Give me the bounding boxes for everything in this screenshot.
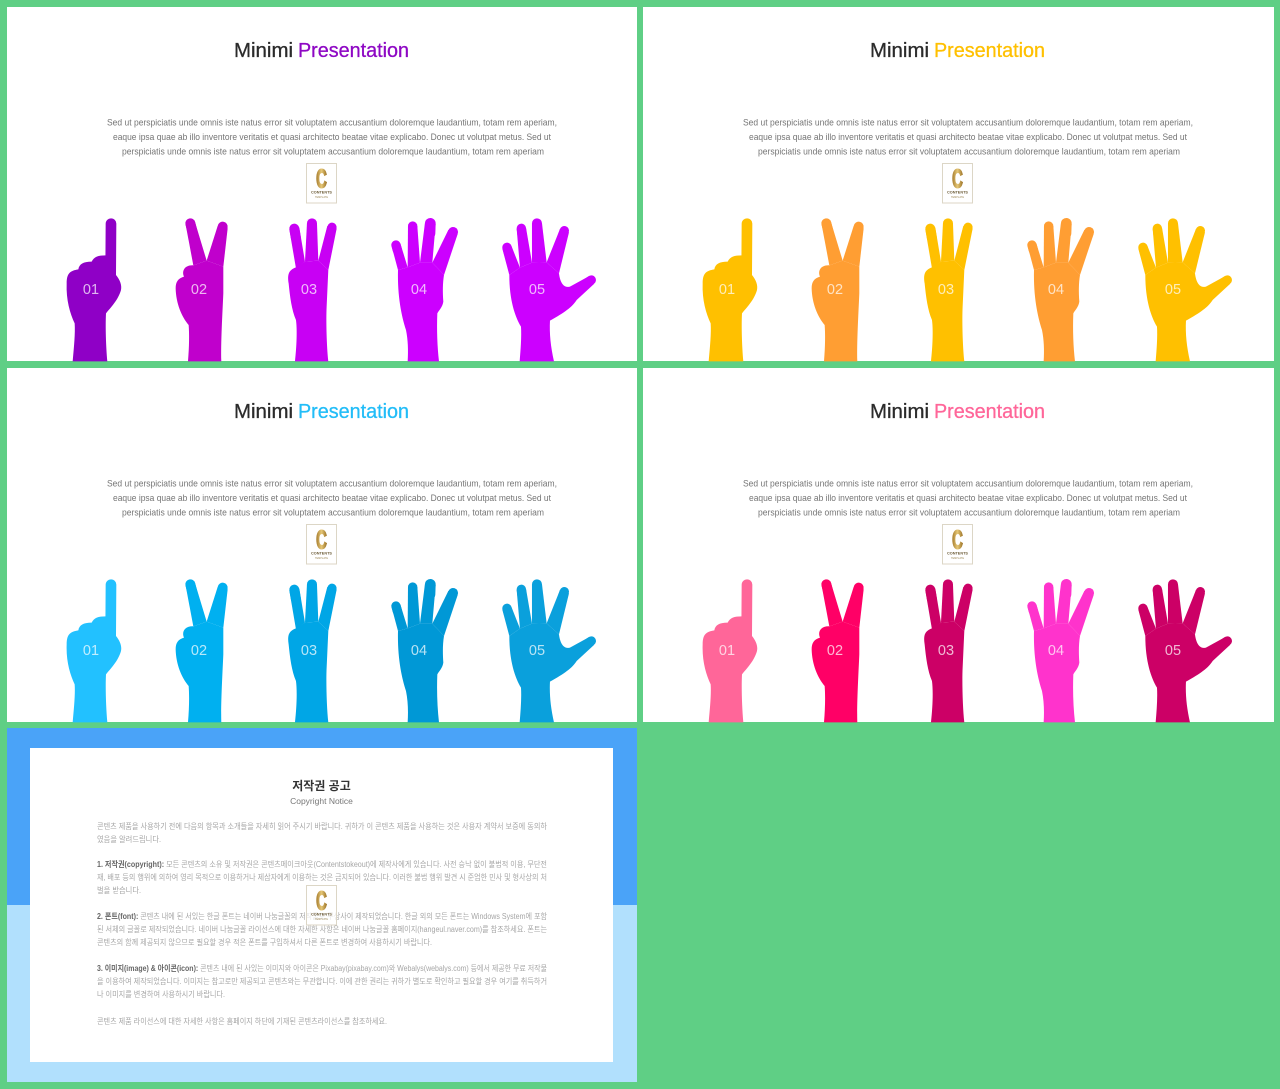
hand 03: 03 — [301, 282, 317, 298]
title: Presentation — [298, 40, 409, 62]
section 2: font — [97, 911, 548, 947]
hand 03 — [288, 584, 337, 722]
title: Presentation — [298, 401, 409, 423]
panel: copyright notice — [7, 728, 637, 1082]
body text: perspiciatis unde omnis iste natus error sit voluptatem accusantium doloremque laudantium, totam rem aperiam — [122, 508, 544, 518]
hand 04 — [392, 223, 458, 361]
section 3: images and icons: 3. 이미지(image) & 아이콘(icon): 콘텐츠 내에 된 사있는 이미지와 아이콘은 Pixabay(pixabay.com)와 Webalys(webalys.com) 등에서 제공한 무료 저작물 — [97, 963, 547, 973]
logo — [942, 164, 972, 203]
hand 04: 04 — [411, 282, 427, 298]
title: Presentation — [934, 40, 1045, 62]
hand 01 — [703, 224, 757, 361]
body text: eaque ipsa quae ab illo inventore veritatis et quasi architecto beatae vitae explicabo. Donec ut volutpat metus. Sed ut — [749, 493, 1187, 503]
hand 04 — [1028, 584, 1094, 722]
intro paragraph — [97, 821, 548, 844]
hand 03: 03 — [938, 282, 954, 298]
logo: C — [952, 526, 963, 555]
panel: purple hands — [7, 7, 637, 361]
title: Minimi — [234, 40, 293, 62]
hand 01 — [67, 585, 121, 722]
logo: C — [316, 165, 327, 194]
section 3: images and icons: 을 이용하여 제작되었습니다. 이미지는 참고로만 제공되고 콘텐츠와는 무관합니다. 이에 관한 권리는 귀하가 별도로 확인하고 필요할 경우 여기를 취득하거 — [97, 976, 547, 986]
copyright heading: 저작권 공고 — [292, 778, 351, 793]
hand 05 — [502, 584, 594, 722]
logo: TEMPLATE — [951, 196, 964, 199]
hand 05: 05 — [1165, 643, 1181, 659]
hand 04 — [392, 584, 458, 722]
title — [870, 40, 1045, 62]
body text — [107, 478, 557, 518]
hand 05 — [1138, 223, 1230, 361]
panel: yellow hands — [643, 7, 1274, 361]
section 1: copyright: 벌을 받습니다. — [97, 885, 141, 895]
hand 03: 03 — [938, 643, 954, 659]
hand 04: 04 — [411, 643, 427, 659]
hand 05 — [1138, 584, 1230, 722]
hand 01 — [67, 224, 121, 361]
hand 01: 01 — [83, 282, 99, 298]
title — [870, 401, 1045, 423]
section 2: font: 콘텐츠의 함께 제공되지 않으므로 필요할 경우 적은 폰트를 구입하셔서 다른 폰트로 변경하여 사용하시기 바랍니다. — [97, 937, 432, 947]
hand 01: 01 — [719, 282, 735, 298]
hand 01: 01 — [719, 643, 735, 659]
section 1: copyright: 1. 저작권(copyright): 모든 콘텐츠의 소유 및 저작권은 콘텐츠메이크아웃(Contentstokeout)에 제작사에게 있습니다. 사전 승낙 없이 불법적 이용, 무단전 — [97, 859, 547, 869]
logo: TEMPLATE — [951, 557, 964, 560]
logo: C — [952, 165, 963, 194]
closing line: 콘텐츠 제품 라이선스에 대한 자세한 사항은 홈페이지 하단에 기재된 콘텐츠라이선스를 참조하세요. — [97, 1016, 387, 1026]
hand 04: 04 — [1048, 643, 1064, 659]
body text: eaque ipsa quae ab illo inventore veritatis et quasi architecto beatae vitae explicabo. Donec ut volutpat metus. Sed ut — [749, 132, 1187, 142]
logo: CONTENTS — [311, 190, 332, 194]
section 2: font: 된 서체의 글꼴로 제작되었습니다. 네이버 나눔글꼴 라이선스에 대한 자세한 사항은 네이버 나눔글꼴 홈페이지(hangeul.naver.com)를 참조하세요. 폰트는 — [97, 924, 547, 934]
section 2: font: 2. 폰트(font): 콘텐츠 내에 된 서있는 한글 폰트는 네이버 나눔글꼴의 저작물로 무상사이 제작되었습니다. 한글 외의 모든 폰트는 Windows System에 포함 — [97, 911, 548, 921]
hand 01: 01 — [83, 643, 99, 659]
title — [234, 40, 409, 62]
logo: C — [316, 526, 327, 555]
section 1: copyright — [97, 859, 547, 895]
hand 03: 03 — [301, 643, 317, 659]
title: Presentation — [934, 401, 1045, 423]
hand 02: 02 — [191, 643, 207, 659]
logo: CONTENTS — [947, 552, 968, 556]
logo: C — [316, 887, 327, 916]
body text: Sed ut perspiciatis unde omnis iste natus error sit voluptatem accusantium doloremque laudantium, totam rem aperiam, — [107, 478, 557, 488]
body text: Sed ut perspiciatis unde omnis iste natus error sit voluptatem accusantium doloremque laudantium, totam rem aperiam, — [743, 118, 1193, 128]
hand 02 — [812, 222, 864, 361]
hand 02: 02 — [191, 282, 207, 298]
section 3: images and icons: 나 이미지를 변경하여 사용하시기 바랍니다. — [97, 989, 225, 999]
hand 05: 05 — [529, 643, 545, 659]
hand 05 — [502, 223, 594, 361]
logo — [942, 524, 972, 564]
logo: CONTENTS — [311, 912, 332, 916]
logo: CONTENTS — [947, 190, 968, 194]
body text: perspiciatis unde omnis iste natus error sit voluptatem accusantium doloremque laudantium, totam rem aperiam — [122, 146, 544, 156]
hand 05: 05 — [529, 282, 545, 298]
body text: perspiciatis unde omnis iste natus error sit voluptatem accusantium doloremque laudantium, totam rem aperiam — [758, 146, 1180, 156]
body text — [743, 478, 1193, 518]
hand 03 — [924, 584, 973, 722]
body text: Sed ut perspiciatis unde omnis iste natus error sit voluptatem accusantium doloremque laudantium, totam rem aperiam, — [107, 118, 557, 128]
panel: blue hands — [7, 368, 637, 722]
logo — [306, 164, 336, 203]
body text — [743, 118, 1193, 156]
copyright subheading: Copyright Notice — [290, 796, 353, 806]
hand 04 — [1028, 223, 1094, 361]
title: Minimi — [870, 40, 929, 62]
section 1: copyright: 재, 배포 등의 행위에 의하여 영리 목적으로 이용하거나 제삼자에게 이용하는 것은 금지되어 있습니다. 이러한 불법 행위 발견 시 준엄한 민사 및 형사상의 처 — [97, 872, 547, 882]
panel: pink hands — [643, 368, 1274, 722]
intro paragraph: 콘텐츠 제품을 사용하기 전에 다음의 항목과 소개들을 자세히 읽어 주시기 바랍니다. 귀하가 이 콘텐츠 제품을 사용하는 것은 사용자 계약서 보증에 동의하 — [97, 821, 548, 831]
logo — [306, 524, 336, 564]
hand 02 — [176, 222, 228, 361]
hand 01 — [703, 585, 757, 722]
body text: eaque ipsa quae ab illo inventore veritatis et quasi architecto beatae vitae explicabo. Donec ut volutpat metus. Sed ut — [113, 493, 551, 503]
logo: TEMPLATE — [315, 557, 328, 560]
title: Minimi — [234, 401, 293, 423]
body text: eaque ipsa quae ab illo inventore veritatis et quasi architecto beatae vitae explicabo. Donec ut volutpat metus. Sed ut — [113, 132, 551, 142]
title: Minimi — [870, 401, 929, 423]
body text — [107, 118, 557, 156]
hand 02: 02 — [827, 643, 843, 659]
logo: TEMPLATE — [315, 918, 328, 921]
body text: perspiciatis unde omnis iste natus error sit voluptatem accusantium doloremque laudantium, totam rem aperiam — [758, 508, 1180, 518]
hand 04: 04 — [1048, 282, 1064, 298]
hand 02: 02 — [827, 282, 843, 298]
title — [234, 401, 409, 423]
hand 03 — [288, 223, 337, 361]
hand 02 — [176, 583, 228, 722]
hand 05: 05 — [1165, 282, 1181, 298]
hand 03 — [924, 223, 973, 361]
logo: CONTENTS — [311, 552, 332, 556]
logo: TEMPLATE — [315, 196, 328, 199]
body text: Sed ut perspiciatis unde omnis iste natus error sit voluptatem accusantium doloremque laudantium, totam rem aperiam, — [743, 478, 1193, 488]
section 3: images and icons — [97, 963, 547, 999]
intro paragraph: 였음을 알려드립니다. — [97, 834, 161, 844]
logo — [306, 886, 336, 925]
hand 02 — [812, 583, 864, 722]
